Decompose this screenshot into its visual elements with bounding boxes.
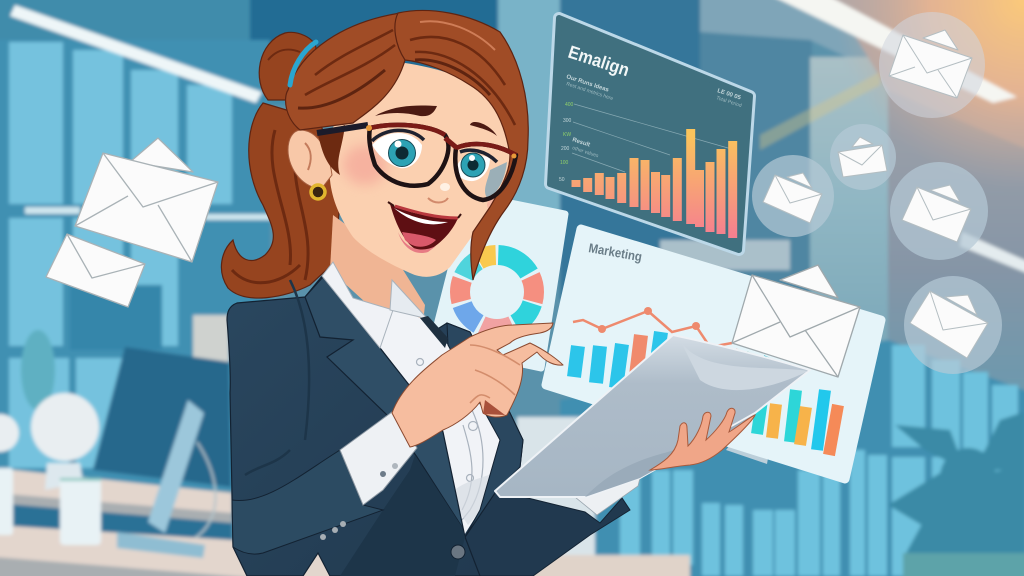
dashboard small labels: LE 00 05 [716,88,742,102]
near cuff [340,412,417,505]
icon bubble: envelope small [830,124,896,190]
woman [221,10,860,576]
icon bubble: envelope middle [752,155,834,237]
right lens shade [485,162,507,198]
plant in window [21,330,55,410]
icon bubble: envelope right [890,162,988,260]
light laptop and floor [517,417,595,555]
far cuff [575,478,640,515]
envelope: left small [46,234,145,307]
marketing bars [574,332,661,395]
dashboard small labels: 50 [559,177,565,183]
lower right bars [757,390,838,455]
jacket left lapel [305,277,465,537]
far hand [650,408,755,470]
dashboard small labels: Our Runs Ideas [565,74,610,94]
dashboard small labels: Rest and metrics here [565,81,614,102]
colored bar tops [735,351,770,361]
marketing chart panel [546,229,881,479]
right windows [560,340,1024,576]
dashboard small labels: 300 [563,118,572,124]
eyebrows [375,105,437,116]
collar dark tab [420,316,448,348]
dashboard grid lines [572,104,735,172]
ponytail [221,103,340,298]
pointing hand [392,323,563,447]
paper document [495,335,810,497]
panel tab [726,445,768,464]
headband [290,42,316,85]
dashboard bar chart [576,129,733,238]
jacket [227,275,523,576]
dashboard small labels: Result [571,137,591,149]
dashboard small labels: 400 [565,102,574,108]
donut chart panel [432,195,565,368]
face [328,63,512,277]
marketing line chart [573,307,732,347]
shirt front [380,305,502,537]
jacket button [451,545,465,559]
envelope: left large [75,138,218,262]
mouth [390,204,458,252]
hair bun [259,32,316,100]
ear [288,130,332,188]
plant silhouette [888,412,1024,555]
upper band [0,0,315,105]
jacket right lapel [447,323,523,537]
dashboard small labels: Total Period [715,95,743,109]
near sleeve [232,450,383,554]
hair strands [305,30,515,125]
earring [311,185,325,199]
dashboard small labels: 200 [561,146,570,152]
left windows [0,40,270,490]
right eye [456,150,497,181]
dashboard small labels: other values [571,145,600,159]
dashboard heading: Emalign [566,42,632,80]
front hair right [395,10,528,280]
sideburn [318,125,345,175]
donut chart [460,255,534,329]
shirt folds [416,358,483,520]
cheek blush [343,145,387,185]
lapel shadow over lower chest [340,455,465,576]
marketing heading: Marketing [587,240,643,264]
neck [330,215,425,350]
dashboard small labels: KW [563,132,571,138]
desk and monitor [0,468,232,523]
sleeve buttons [320,521,346,540]
envelope on document [732,265,860,377]
left eye [372,130,424,168]
glasses [317,125,516,200]
nose [428,198,448,202]
email dashboard panel [550,18,750,250]
icon bubble: envelope lower right [904,276,1002,374]
far arm sleeve [465,490,630,576]
paper shadow fold [585,414,755,497]
paper curled edge [680,340,808,390]
centre column and panels [498,0,560,245]
front hair left [286,13,405,130]
dashboard small labels [559,74,743,183]
dashboard small labels: 100 [560,160,569,166]
shirt collar [322,262,393,348]
icon bubble: envelope top right [879,12,985,118]
